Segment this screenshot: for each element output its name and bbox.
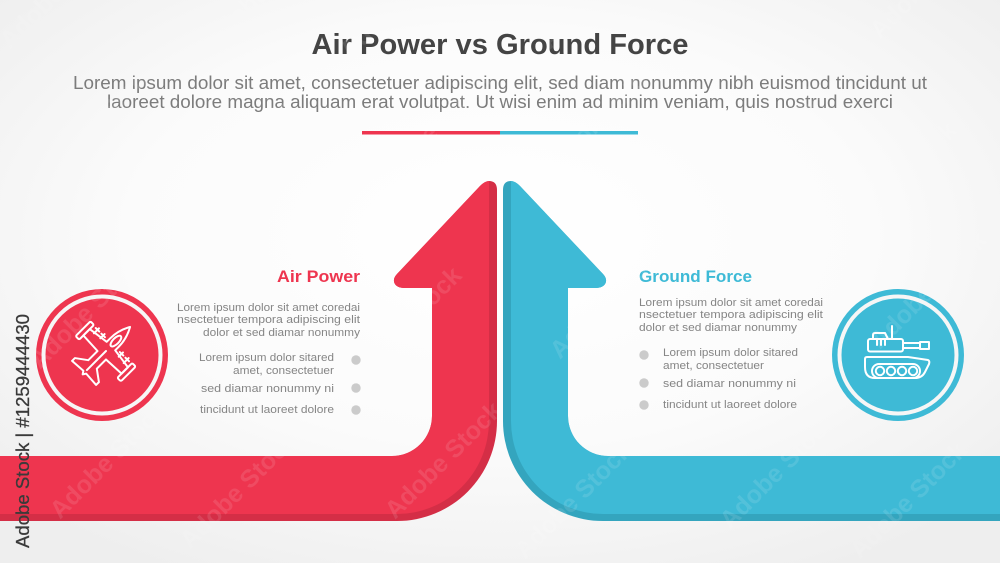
icon: fighter jet in red circle (36, 289, 168, 421)
ground force description: dolor et sed diamar nonummy (639, 322, 798, 334)
air power bullet list (199, 352, 361, 416)
watermarks: Adobe Stock (509, 436, 637, 563)
subtitle: laoreet dolore magna aliquam erat volutpat. Ut wisi enim ad minim veniam, quis nostrud exerci (107, 92, 893, 112)
ground force bullet list: tincidunt ut laoreet dolore (663, 399, 797, 411)
watermarks: Adobe Stock (24, 246, 152, 374)
air power heading: Air Power (277, 267, 360, 286)
ground force bullet list: Lorem ipsum dolor sitared (663, 347, 798, 359)
panel: air power (177, 267, 361, 416)
watermarks: Adobe Stock (544, 236, 672, 364)
watermarks: Adobe Stock (34, 56, 162, 184)
air power bullet list: tincidunt ut laoreet dolore (200, 404, 334, 416)
vertical stock id label: Adobe Stock | #1259444430 (13, 314, 33, 548)
ground force bullet list (639, 347, 798, 411)
watermarks: Adobe Stock (379, 396, 507, 524)
ground force description: Lorem ipsum dolor sit amet coredai (639, 297, 823, 309)
watermarks: Adobe Stock (714, 406, 842, 534)
subtitle (73, 73, 927, 112)
watermarks: Adobe Stock (174, 426, 302, 554)
watermarks: Adobe Stock (844, 436, 972, 563)
ground force description (639, 297, 823, 334)
air power bullet list: Lorem ipsum dolor sitared (199, 352, 334, 364)
ground force heading: Ground Force (639, 267, 752, 286)
air power bullet list: amet, consectetuer (233, 365, 334, 377)
ground force bullet list: amet, consectetuer (663, 360, 764, 372)
subtitle: Lorem ipsum dolor sit amet, consectetuer adipiscing elit, sed diam nonummy nibh euismod tincidunt ut (73, 73, 927, 93)
ground force bullet list: sed diamar nonummy ni (663, 378, 796, 390)
air power description: dolor et sed diamar nonummy (203, 327, 361, 339)
air power description: nsectetuer tempora adipiscing elit (177, 314, 360, 326)
watermarks: Adobe Stock (834, 116, 962, 244)
title: Air Power vs Ground Force (312, 29, 688, 61)
watermarks: Adobe Stock (704, 76, 832, 204)
arrow: air power (red) (0, 181, 497, 521)
watermarks: Adobe Stock (339, 261, 467, 389)
air power description: Lorem ipsum dolor sit amet coredai (177, 302, 360, 314)
watermarks: Adobe Stock (864, 226, 992, 354)
panel: ground force (639, 267, 823, 411)
watermarks: Adobe Stock (369, 66, 497, 194)
icon: tank in blue circle (832, 289, 964, 421)
arrow: ground force (blue) (503, 181, 1000, 521)
air power bullet list: sed diamar nonummy ni (201, 383, 334, 395)
ground force description: nsectetuer tempora adipiscing elit (639, 309, 823, 321)
air power description (177, 302, 361, 339)
watermarks: Adobe Stock (44, 396, 172, 524)
watermarks: Adobe Stock (169, 96, 297, 224)
watermarks: Adobe Stock (544, 46, 672, 174)
title divider (362, 131, 638, 134)
